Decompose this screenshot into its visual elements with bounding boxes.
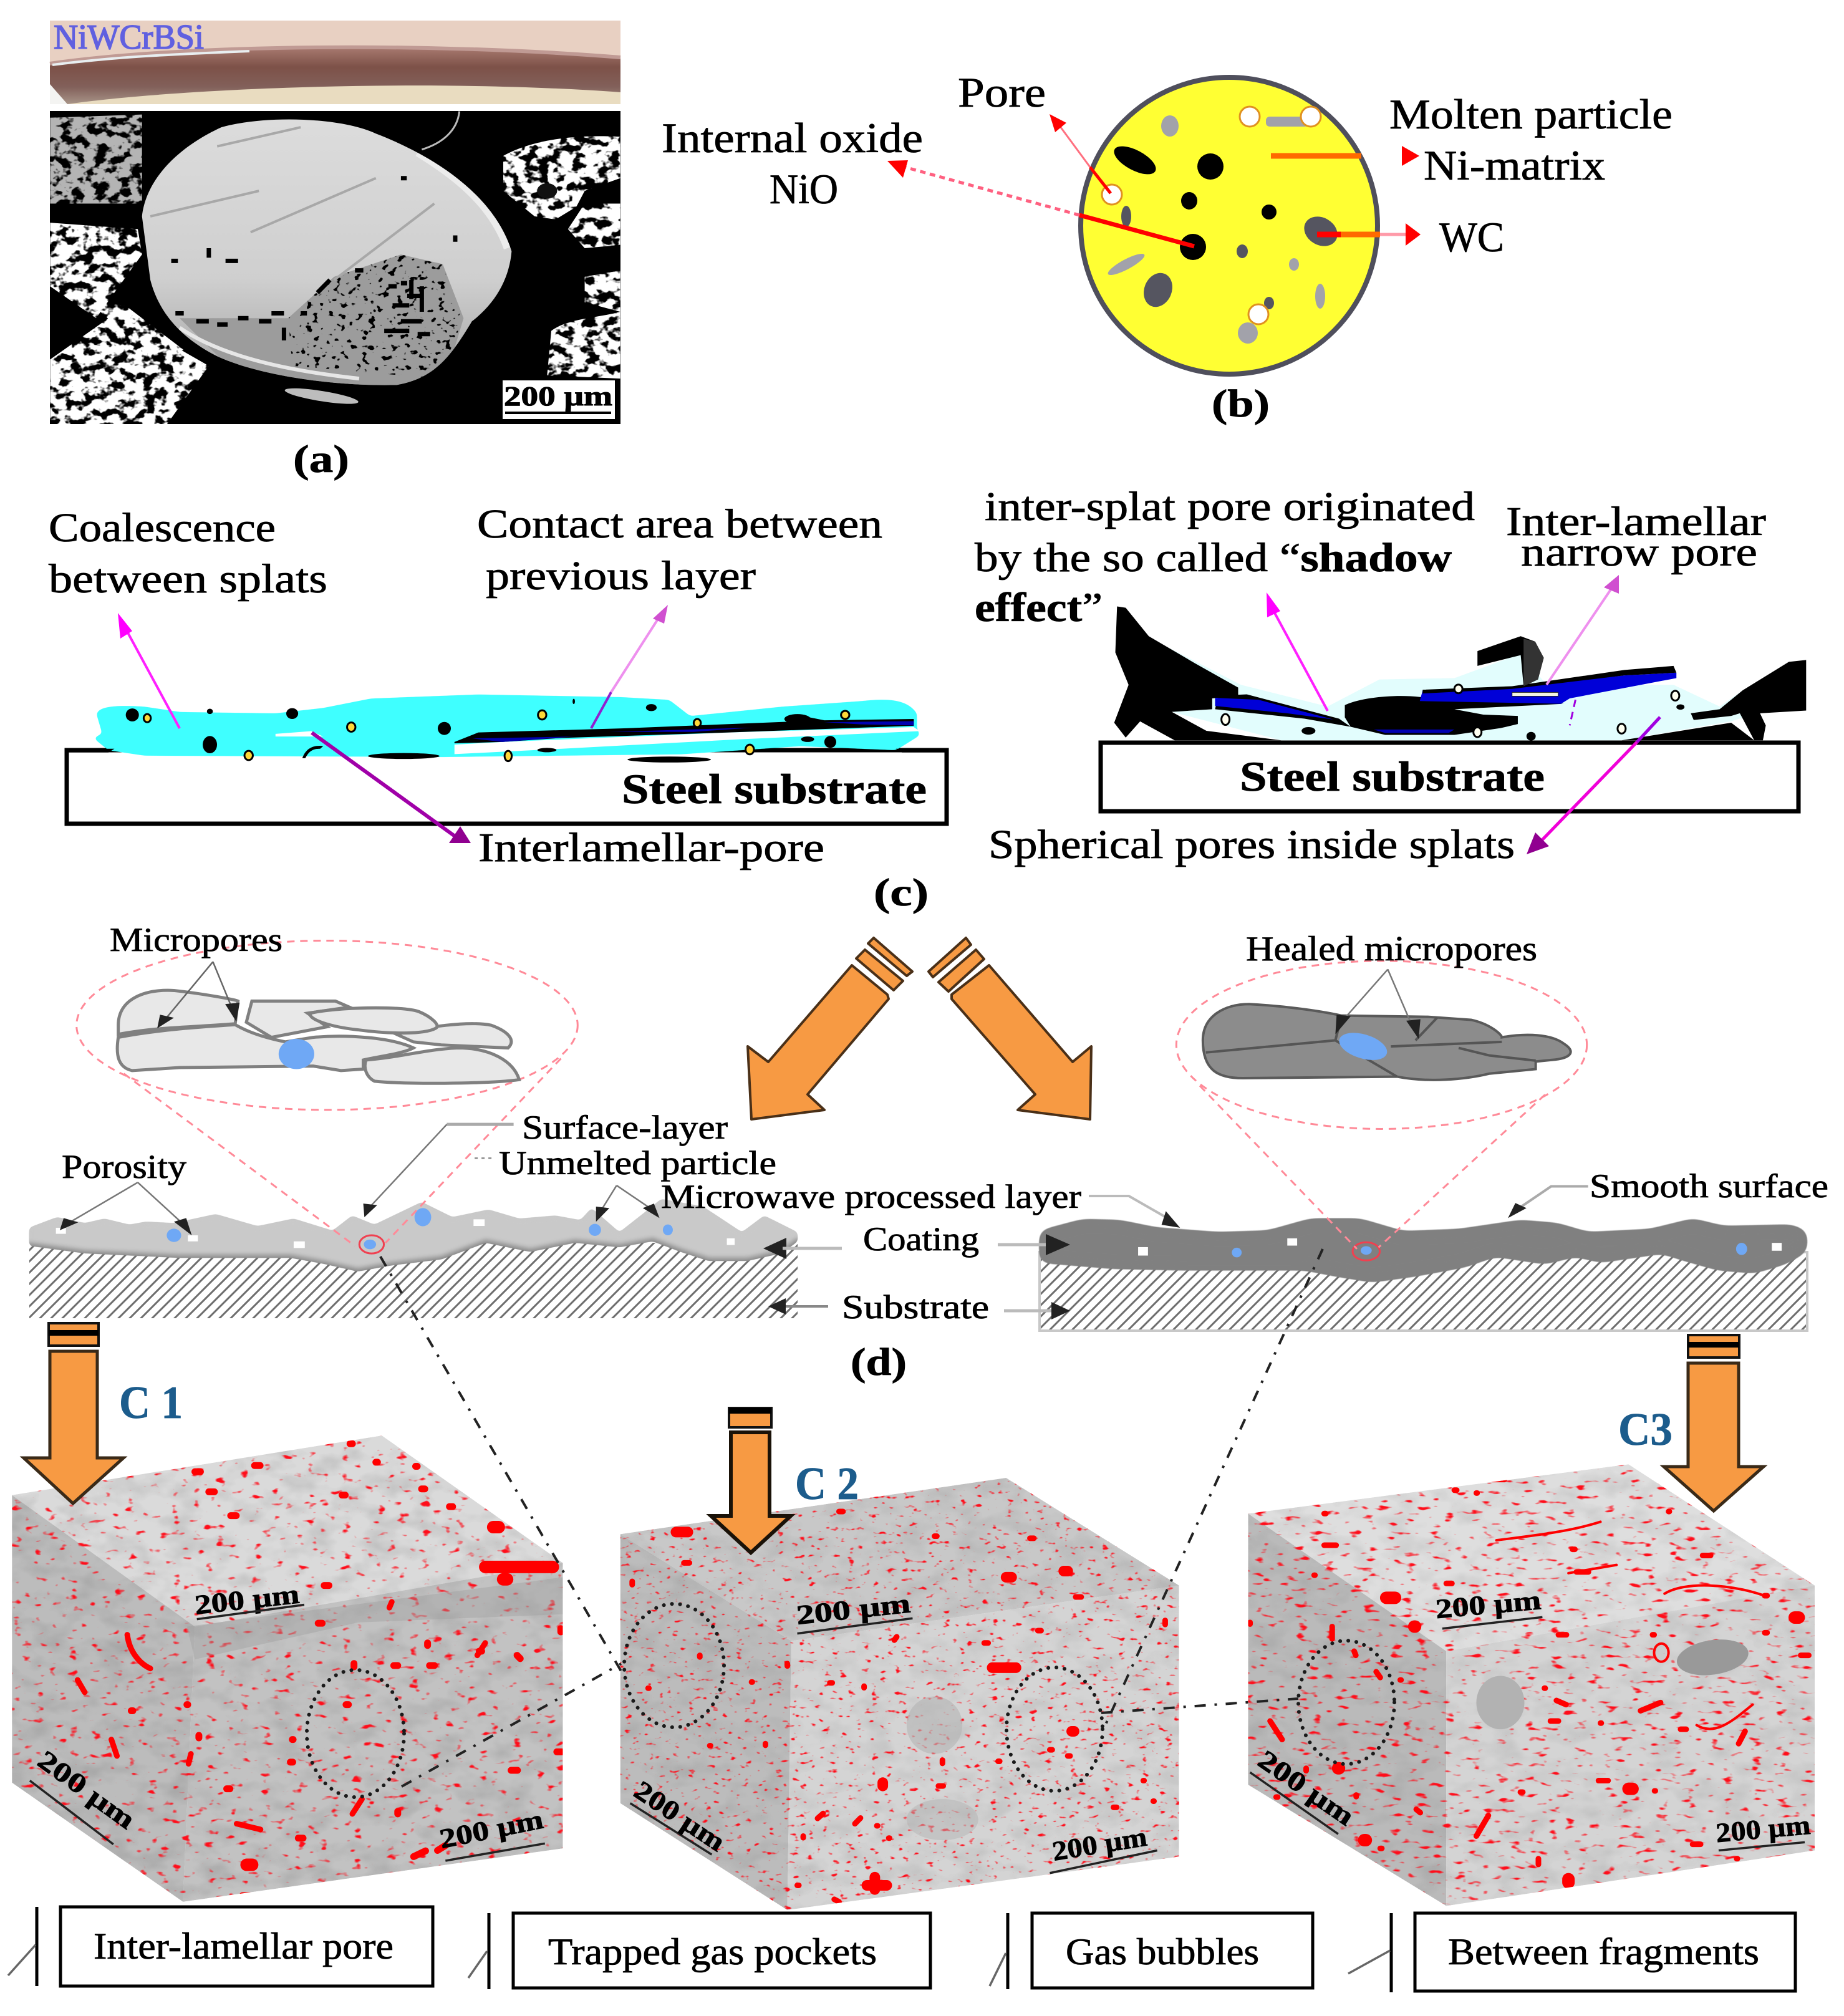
dash-dot connector lines xyxy=(380,1249,1323,1787)
SEM: scale bar xyxy=(503,380,615,419)
label: Porosity: Porosity xyxy=(62,1148,186,1185)
pointers: left coating callouts xyxy=(60,1124,660,1235)
box: Between fragments xyxy=(1348,1913,1795,1992)
pores in splats xyxy=(67,698,947,763)
arrow: interlamellar pore xyxy=(312,733,471,843)
label: Coalescence between splats: between splats xyxy=(49,556,327,602)
contact layer between splats xyxy=(276,715,920,754)
label: Microwave processed layer: Microwave processed layer xyxy=(661,1178,1081,1215)
dotted circles on cubes xyxy=(307,1604,1394,1797)
pointers: coating and substrate xyxy=(763,1234,1070,1319)
panel c left: steel substrate box xyxy=(67,750,947,824)
label: C 2: C 2 xyxy=(795,1459,859,1510)
label: Contact area between previous layer xyxy=(477,501,882,599)
arrow: spherical pores xyxy=(1527,717,1660,854)
label: Ni-matrix: Ni-matrix xyxy=(1424,142,1605,189)
label: Inter-lamellar narrow pore: narrow pore xyxy=(1521,529,1757,575)
scale labels C3 xyxy=(1250,1584,1812,1851)
caption (a): (a) xyxy=(293,438,349,481)
scale labels C2: 200 µm xyxy=(1050,1821,1149,1867)
panel c right: shadow effect splats xyxy=(1114,607,1806,741)
pointers: right coating callouts xyxy=(1089,1187,1588,1228)
panel c left: cyan splats xyxy=(67,695,947,763)
box: Trapped gas pockets xyxy=(468,1913,930,1989)
arrow: WC xyxy=(1317,223,1421,246)
label: Contact area between previous layer: previous layer xyxy=(486,553,756,599)
panel d right: microwave processed coating xyxy=(1040,1218,1807,1331)
box: Gas bubbles: Gas bubbles xyxy=(1066,1931,1259,1972)
scale labels C3: 200 µm xyxy=(1253,1744,1360,1832)
box: Inter-lamellar pore xyxy=(8,1907,433,1986)
label: C 1: C 1 xyxy=(119,1377,183,1429)
label: Coating: Coating xyxy=(863,1220,979,1258)
arrow: contact area xyxy=(591,605,668,728)
label: Steel substrate right: Steel substrate xyxy=(1240,753,1545,800)
caption (d): (d) xyxy=(851,1341,907,1384)
cube C2 xyxy=(616,1475,1181,1914)
label: Surface-layer: Surface-layer xyxy=(522,1109,728,1146)
box: Between fragments: Between fragments xyxy=(1448,1931,1759,1972)
label: WC: WC xyxy=(1439,213,1504,261)
scale labels C2 xyxy=(629,1588,1157,1873)
arrow: Ni-matrix xyxy=(1271,146,1419,166)
label: Internal oxide NiO: NiO xyxy=(770,165,838,213)
scale labels C3: 200 µm xyxy=(1434,1584,1542,1624)
label: Internal oxide NiO xyxy=(662,114,923,213)
label: shadow effect text: inter-splat pore originated xyxy=(985,484,1475,529)
scale labels C3: 200 µm xyxy=(1714,1809,1812,1848)
box: Trapped gas pockets: Trapped gas pockets xyxy=(548,1931,877,1972)
label: Smooth surface: Smooth surface xyxy=(1590,1167,1828,1205)
scale labels C2: 200 µm xyxy=(629,1774,731,1858)
label: Micropores: Micropores xyxy=(110,921,282,958)
SEM: scale bar: 200 µm xyxy=(504,381,612,412)
label: shadow effect text: by the so called “ shadow xyxy=(975,535,1452,581)
label: Substrate: Substrate xyxy=(842,1288,989,1326)
bubble: micropores magnified xyxy=(77,940,577,1246)
label: shadow effect text xyxy=(975,484,1475,630)
panel a: wire photo xyxy=(50,18,620,104)
arrow: coalescence xyxy=(118,613,180,728)
label: Coalescence between splats xyxy=(49,505,327,602)
caption (b): (b) xyxy=(1212,383,1270,425)
arrow: pore xyxy=(1050,114,1111,193)
arrow: narrow pore xyxy=(1547,575,1619,685)
SEM: spherical particle xyxy=(142,119,511,385)
label: NiWCrBSi: NiWCrBSi xyxy=(54,18,204,57)
label: C3: C3 xyxy=(1618,1404,1673,1455)
label: Coalescence between splats: Coalescence xyxy=(49,505,276,551)
panel c right: steel substrate box xyxy=(1101,743,1798,811)
label: Pore: Pore xyxy=(958,69,1046,116)
scale labels C1: 200 µm xyxy=(193,1578,301,1621)
pointers: micropores xyxy=(157,962,239,1028)
arrow C3 xyxy=(1664,1335,1764,1511)
arrow C1 xyxy=(24,1323,123,1503)
label: Spherical pores inside splats: Spherical pores inside splats xyxy=(988,822,1515,867)
scale labels C1: 200 µm xyxy=(437,1803,546,1854)
arrow: internal oxide xyxy=(887,160,1194,246)
label: Inter-lamellar narrow pore: Inter-lamellar xyxy=(1506,499,1766,544)
arrow: large orange right xyxy=(929,938,1091,1119)
label: Steel substrate left: Steel substrate xyxy=(622,765,927,813)
panel d left: as-sprayed coating xyxy=(29,1199,798,1318)
label: Unmelted particle: Unmelted particle xyxy=(499,1144,776,1182)
caption (c): (c) xyxy=(874,872,929,914)
label: Inter-lamellar narrow pore xyxy=(1506,499,1766,575)
arrow: shadow effect pore xyxy=(1267,592,1328,711)
scale labels C1 xyxy=(30,1578,546,1861)
panel a: SEM micrograph xyxy=(50,111,620,425)
arrow C2 xyxy=(711,1408,791,1553)
scale labels C1: 200 µm xyxy=(32,1744,141,1835)
scale labels C2: 200 µm xyxy=(794,1588,912,1631)
label: Internal oxide NiO: Internal oxide xyxy=(662,114,923,162)
box: Gas bubbles xyxy=(990,1913,1313,1989)
box: Inter-lamellar pore: Inter-lamellar pore xyxy=(94,1926,393,1967)
label: shadow effect text: effect ” xyxy=(975,585,1103,630)
label: Molten particle: Molten particle xyxy=(1389,90,1673,138)
pointers: healed micropores xyxy=(1335,970,1421,1039)
label: Healed micropores: Healed micropores xyxy=(1246,930,1537,968)
cube C3 xyxy=(1244,1462,1817,1910)
bubble: healed micropores magnified xyxy=(1176,961,1587,1249)
arrow: large orange left xyxy=(748,938,912,1119)
label: Contact area between previous layer: Contact area between xyxy=(477,501,882,547)
cube C1 xyxy=(8,1434,565,1906)
label: Interlamellar-pore: Interlamellar-pore xyxy=(478,825,824,871)
panel b: molten particle diagram xyxy=(887,77,1421,374)
